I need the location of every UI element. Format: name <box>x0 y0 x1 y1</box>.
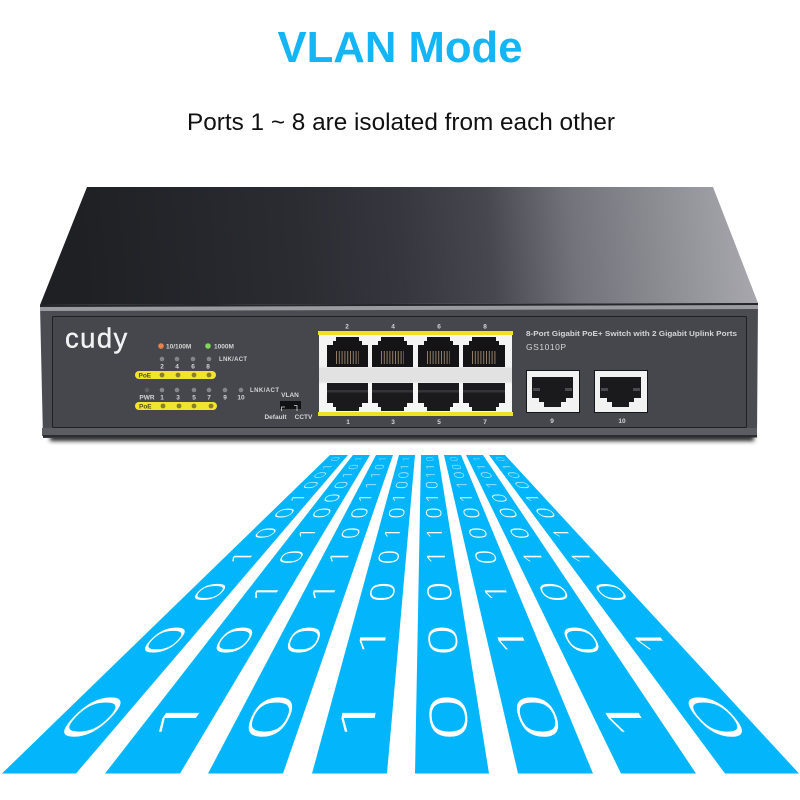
data stream strip 3: 0 <box>228 693 313 741</box>
data stream strip 3: 1 <box>300 582 349 602</box>
data stream strip 3: 1 <box>361 481 383 489</box>
switch shadow <box>50 435 754 441</box>
port number labels: 7 <box>483 419 487 426</box>
upper LED row: 6 <box>191 364 195 370</box>
data stream strip 6: 0 <box>462 527 494 539</box>
VLAN DIP switch: CCTV <box>295 414 313 421</box>
data stream strip 2: 1 <box>134 693 230 741</box>
lower port latch details <box>327 390 505 392</box>
data stream strip 5: 0 <box>415 693 481 741</box>
lower LED row: 1 <box>160 394 164 402</box>
data stream strip 3: 0 <box>344 507 375 519</box>
data stream strip 4: 1 <box>398 464 413 470</box>
port number labels: 2 <box>345 324 349 330</box>
cudy logo: cudy <box>65 322 129 354</box>
data stream strip 7: 0 <box>548 624 615 656</box>
product description: 8-Port Gigabit PoE+ Switch with 2 Gigabit Uplink Ports <box>526 329 737 338</box>
lower LED row: 10 <box>237 394 245 402</box>
upper LED row: 4 <box>175 364 179 370</box>
port number labels: 4 <box>391 324 395 330</box>
port number labels: 5 <box>437 419 441 426</box>
data stream strip 3: 0 <box>335 527 368 539</box>
lower LED row: LNK/ACT <box>250 388 279 394</box>
data stream strip 8: 0 <box>493 457 509 461</box>
speed legend: 10/100M <box>166 344 191 350</box>
subtitle: Ports 1 ~ 8 are isolated from each other <box>187 109 615 136</box>
data stream strip 7: 1 <box>480 481 504 489</box>
data stream strip 7: 0 <box>529 582 580 602</box>
upper LED row: 2 <box>160 364 164 370</box>
data stream strip 7 <box>466 455 696 774</box>
data stream strip 7: 1 <box>581 693 672 741</box>
data stream strip 2: 0 <box>270 550 314 564</box>
data stream strip 4: 1 <box>324 693 396 741</box>
data stream strip 5: 1 <box>424 464 438 470</box>
data stream strip 4: 0 <box>360 582 405 602</box>
switch top face <box>40 187 758 305</box>
data stream strip 6: 0 <box>448 464 465 470</box>
data stream strip 4: 1 <box>347 624 401 656</box>
upper LED row: 8 <box>206 364 210 370</box>
lower LED row: 5 <box>192 394 196 402</box>
PoE port block: ports 1-8 <box>318 331 513 416</box>
data stream strip 1: 1 <box>318 464 338 470</box>
speed legend <box>158 343 234 350</box>
data stream strip 1: 0 <box>267 507 303 519</box>
lower LED row: PWR <box>139 394 155 402</box>
data stream strip 3: 1 <box>377 456 391 461</box>
PoE indicator 1: PoE <box>138 372 152 380</box>
data stream strip 5 <box>415 455 489 774</box>
data stream strip 2: 0 <box>345 464 363 470</box>
port number labels: 9 <box>550 418 554 425</box>
data stream strip 5: 1 <box>422 494 444 502</box>
lower LED row <box>139 388 279 402</box>
data stream strip 2: 1 <box>242 582 295 602</box>
data stream strip 2: 1 <box>339 472 359 478</box>
data stream strip 6: 1 <box>474 582 520 602</box>
data stream strip 8: 0 <box>583 582 640 602</box>
data stream strip 8: 0 <box>529 507 564 519</box>
lower LED row: 7 <box>207 394 211 402</box>
data stream strip 6: 1 <box>454 494 479 502</box>
data stream strip 4: 1 <box>378 527 408 539</box>
title: VLAN Mode <box>278 23 522 72</box>
data stream strip 8: 1 <box>497 464 517 470</box>
data stream strip 5: 0 <box>423 481 442 489</box>
data stream strip 8: 1 <box>543 527 581 539</box>
data stream strip 1: 0 <box>181 582 240 602</box>
data stream strip 1: 0 <box>328 457 344 461</box>
data stream strip 8: 0 <box>503 472 526 478</box>
uplink port 10 <box>594 370 648 412</box>
data stream strip 5: 1 <box>421 527 450 539</box>
data stream strip 1: 0 <box>310 471 333 478</box>
data stream strip 1: 0 <box>247 527 285 539</box>
data stream strip 6: 0 <box>448 456 462 461</box>
data stream strip 8: 1 <box>519 494 548 502</box>
VLAN DIP switch <box>264 392 313 421</box>
data stream strip 5: 0 <box>424 457 437 461</box>
data stream strip 5: 0 <box>418 582 460 602</box>
data stream strip 8: 0 <box>509 481 535 489</box>
data stream strip 2 <box>105 455 370 774</box>
lower ports <box>327 383 505 411</box>
data stream strip 1: 0 <box>38 693 147 741</box>
upper LED row: LNK/ACT <box>219 357 247 363</box>
uplink port 9 <box>526 370 580 412</box>
data stream strip 1: 0 <box>127 624 204 656</box>
upper LED row <box>160 357 247 370</box>
data stream strip 1: 1 <box>284 494 314 502</box>
data stream strip 5: 1 <box>420 550 454 564</box>
data stream strip 4: 1 <box>401 457 414 461</box>
data stream strip 6 <box>444 455 593 774</box>
data stream strip 6: 0 <box>499 693 577 741</box>
data stream strip 3: 1 <box>322 550 361 564</box>
switch front face <box>40 303 758 438</box>
data stream strip 6: 0 <box>449 471 469 478</box>
data stream strip 4: 0 <box>393 481 413 489</box>
data stream strip 1: 1 <box>219 550 267 564</box>
data stream strip 4: 0 <box>395 471 413 478</box>
data stream strip 5: 1 <box>423 472 440 478</box>
model number: GS1010P <box>526 342 566 352</box>
VLAN DIP switch: Default <box>264 414 287 421</box>
PoE indicator 2 <box>135 402 217 410</box>
data stream strip 8: 1 <box>614 624 688 656</box>
port number labels: 8 <box>483 324 487 330</box>
PoE indicator 1 <box>135 371 216 380</box>
data stream strip 4: 1 <box>388 494 411 502</box>
network switch <box>40 187 758 441</box>
data stream strip 4 <box>312 455 415 774</box>
data stream strip 8: 0 <box>664 693 767 741</box>
port number labels: 3 <box>391 419 395 426</box>
data stream strip 2: 0 <box>328 481 354 489</box>
port number labels <box>345 324 626 426</box>
data stream strip 7: 1 <box>471 456 485 461</box>
port number labels: 1 <box>346 419 350 426</box>
data stream strip 4: 0 <box>382 507 411 519</box>
VLAN DIP switch: VLAN <box>281 392 299 399</box>
port contacts <box>336 351 496 364</box>
data stream strip 1 <box>2 455 348 774</box>
data stream strip 6: 0 <box>468 550 506 564</box>
lower LED row: 3 <box>176 394 180 402</box>
data stream strip 5: 0 <box>418 624 468 656</box>
data stream strip 8: 1 <box>559 550 605 564</box>
data stream strip 2: 1 <box>353 457 367 461</box>
data stream strip 3: 1 <box>366 472 386 478</box>
data stream strip 3: 0 <box>274 624 335 656</box>
data stream strip 3: 0 <box>371 464 388 470</box>
data stream strip 5: 0 <box>420 507 447 519</box>
data stream strip 7: 0 <box>492 507 524 519</box>
data stream strip 7: 0 <box>477 472 497 478</box>
data stream strip 6: 0 <box>457 507 486 519</box>
port number labels: 10 <box>618 418 626 425</box>
data stream strip 2: 1 <box>291 527 327 539</box>
data stream strip 7: 1 <box>514 550 555 564</box>
data stream strip 1: 0 <box>297 481 324 489</box>
data stream strip 2: 0 <box>319 494 347 502</box>
data stream strip 8 <box>489 455 799 774</box>
port number labels: 6 <box>437 324 441 330</box>
data stream strip 3: 1 <box>353 494 379 502</box>
data stream strip 7: 0 <box>487 494 514 502</box>
upper ports <box>327 337 505 367</box>
data stream strip 6: 1 <box>452 481 474 489</box>
PoE indicator 2: PoE <box>139 404 152 410</box>
data stream strip 7: 1 <box>473 464 491 470</box>
data stream strip 7: 0 <box>504 527 538 539</box>
data stream strip 2: 0 <box>201 624 270 656</box>
data stream strip 2: 0 <box>306 507 339 519</box>
data stream strip 6: 1 <box>483 624 542 656</box>
lower LED row: 9 <box>223 394 227 402</box>
data stream strip 4: 0 <box>370 550 407 564</box>
data stream strip 3 <box>208 455 393 774</box>
speed legend: 1000M <box>214 344 234 350</box>
